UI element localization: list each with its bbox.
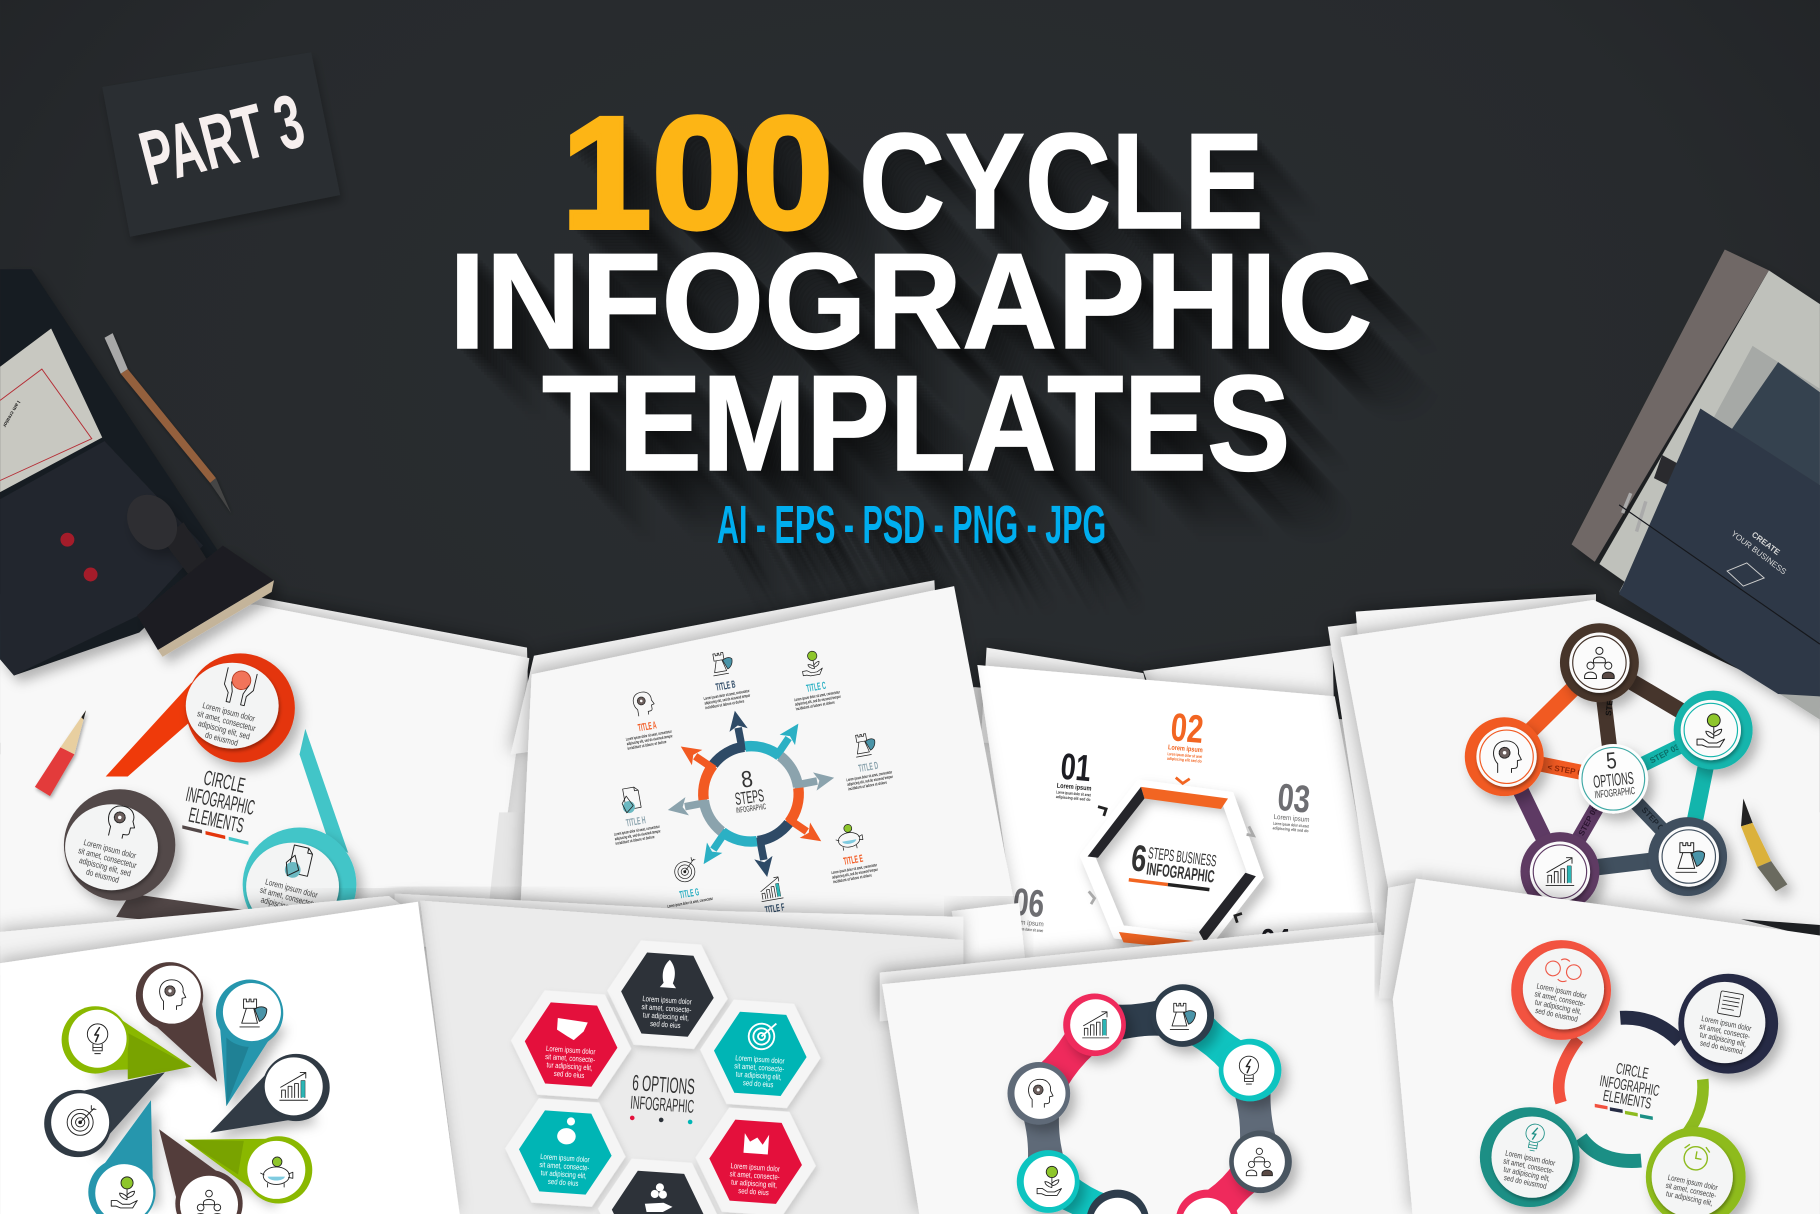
badge: part 3 card: PART 3 bbox=[132, 79, 312, 202]
center hub: 5 bbox=[1605, 747, 1618, 774]
item: title e: Lorem ipsum dolor sit amet, consectetur bbox=[831, 862, 878, 875]
brown ribbon bbox=[116, 894, 244, 928]
step 06: Lorem ipsum dolor sit amet bbox=[1007, 925, 1044, 933]
step 01: 01 bbox=[1059, 745, 1093, 789]
chevrons bbox=[1089, 778, 1254, 923]
arrow: orange bbox=[776, 788, 839, 849]
under sheet bbox=[488, 812, 546, 917]
item: title d: adipiscing elit, sed do eiusmod tempor bbox=[847, 774, 894, 787]
item: title e: adipiscing elit, sed do eiusmod tempor bbox=[832, 867, 879, 880]
item: title g: Lorem ipsum dolor sit amet, consectetur bbox=[667, 896, 714, 909]
petal: green bulb bbox=[62, 1006, 192, 1079]
heading: circle infographic elements bbox=[1596, 1058, 1663, 1114]
item: title g bbox=[660, 855, 714, 909]
front sheet bbox=[977, 665, 1384, 963]
prop: rubber stamp bbox=[117, 485, 274, 657]
hexagon: piggy bank: tur adipiscing elit, bbox=[540, 1170, 587, 1181]
badge: part 3 card bbox=[102, 52, 340, 237]
node: team bbox=[1560, 623, 1639, 702]
hexagon: handshake: Lorem ipsum dolor bbox=[546, 1045, 596, 1057]
front sheet bbox=[0, 604, 529, 946]
step 02: adipiscing elit sed do bbox=[1167, 756, 1202, 764]
item: title d: TITLE D bbox=[858, 761, 879, 775]
heading: 6 options bbox=[629, 1070, 696, 1124]
item: title d: incididunt ut labore et dolore bbox=[848, 780, 888, 791]
business card: I am creator bbox=[1, 399, 21, 428]
ring: teal bbox=[243, 828, 356, 941]
ring: navy notes bbox=[1678, 974, 1778, 1074]
ring: brown bbox=[64, 789, 175, 901]
step 01: Lorem ipsum dolor sit amet bbox=[1056, 789, 1092, 797]
hexagon: bar chart: Lorem ipsum dolor bbox=[730, 1163, 781, 1174]
hexagon: bar chart: sed do eius bbox=[738, 1188, 769, 1198]
ring: red minds: tur adipiscing elit, bbox=[1534, 999, 1582, 1016]
ring: teal bulb: tur adipiscing elit, bbox=[1503, 1166, 1551, 1184]
item: title a: incididunt ut labore et dolore bbox=[627, 739, 667, 751]
item: title h: incididunt ut labore et dolore bbox=[615, 834, 655, 846]
item: title h: Lorem ipsum dolor sit amet, consectetur bbox=[613, 824, 660, 837]
ring: teal bulb: sit amet, consecte- bbox=[1502, 1158, 1555, 1176]
panel: pinwheel petals bbox=[0, 896, 460, 1214]
hexagon: rocket: tur adipiscing elit, bbox=[643, 1012, 689, 1023]
ring: teal bulb bbox=[1480, 1107, 1580, 1207]
node: bottom navy bbox=[1086, 1190, 1149, 1214]
ring: red minds: sit amet, consecte- bbox=[1534, 991, 1586, 1009]
step 02: 02 bbox=[1169, 705, 1205, 752]
hexagon: bar chart: sit amet, consecte- bbox=[729, 1171, 780, 1182]
spokes bbox=[1504, 663, 1713, 872]
heading: circle infographic elements: ELEMENTS bbox=[1602, 1088, 1653, 1113]
item: title b: incididunt ut labore et dolore bbox=[705, 698, 745, 710]
node: chart bbox=[1520, 832, 1599, 911]
white sheet bbox=[0, 902, 460, 1214]
item: title f bbox=[758, 877, 786, 917]
front sheet bbox=[882, 934, 1416, 1214]
ring: navy notes: tur adipiscing elit, bbox=[1699, 1031, 1747, 1049]
panel: eight steps arrows bbox=[488, 580, 1017, 917]
hexagon: target: sed do eius bbox=[743, 1080, 774, 1090]
item: title e: TITLE E bbox=[843, 854, 864, 868]
notebook cover text: YOUR BUSINESS bbox=[1729, 529, 1789, 577]
petal: brown people bbox=[159, 1129, 243, 1214]
step 06: 06 bbox=[1011, 880, 1046, 926]
node: head bbox=[1007, 1062, 1070, 1125]
item: title d bbox=[839, 730, 894, 791]
step 03: Lorem ipsum dolor sit amet bbox=[1273, 821, 1310, 829]
front sheet bbox=[1393, 879, 1820, 1214]
petal: teal tower bbox=[216, 980, 283, 1106]
center label: 8 steps: STEPS bbox=[734, 785, 765, 809]
node: tower bbox=[1151, 984, 1214, 1047]
prop: envelope folder bbox=[0, 269, 221, 675]
hexagon: piggy bank bbox=[501, 1096, 629, 1209]
title: infographic: INFOGRAPHIC bbox=[449, 225, 1372, 377]
ring: red minds: Lorem ipsum dolor bbox=[1536, 983, 1588, 1001]
icon: red pencil bbox=[35, 710, 86, 796]
ring: brown: sit amet, consectetur bbox=[77, 845, 138, 871]
hexagon: rocket: Lorem ipsum dolor bbox=[642, 995, 693, 1007]
item: title a: Lorem ipsum dolor sit amet, consectetur bbox=[625, 729, 672, 742]
hexagon: target: Lorem ipsum dolor bbox=[735, 1055, 785, 1066]
ring: red: do eiusmod bbox=[204, 730, 239, 748]
node: plant coin bbox=[1674, 691, 1753, 769]
panel: circle infographic elements, four rings bbox=[1379, 879, 1820, 1214]
waisted connectors bbox=[1016, 992, 1284, 1214]
item: title d: Lorem ipsum dolor sit amet, consectetur bbox=[846, 769, 893, 782]
notebook cover text: CREATE bbox=[1750, 530, 1782, 557]
outer links bbox=[1504, 663, 1713, 872]
back sheet bbox=[0, 594, 529, 743]
node: plant bbox=[1017, 1150, 1079, 1213]
title: 100: 100 bbox=[561, 83, 833, 262]
arrow: gray west bbox=[666, 792, 722, 841]
item: title c bbox=[786, 648, 842, 711]
panel: five options network bbox=[1328, 594, 1820, 942]
ring: green clock: Lorem ipsum dolor bbox=[1667, 1174, 1719, 1193]
ring: brown: do eiusmod bbox=[85, 867, 120, 885]
arrow: orange west bbox=[663, 739, 726, 800]
item: title a: adipiscing elit, sed do eiusmod tempor bbox=[626, 733, 673, 746]
ring: teal: adipiscing elit, sed bbox=[260, 895, 314, 918]
hexagon: handshake: sit amet, consecte- bbox=[545, 1053, 595, 1065]
step 01: Lorem ipsum bbox=[1056, 783, 1092, 793]
title: templates: TEMPLATES bbox=[542, 347, 1290, 499]
item: title b bbox=[696, 649, 752, 710]
hexagon: piggy bank: sed do eius bbox=[548, 1178, 579, 1188]
item: title b: Lorem ipsum dolor sit amet, consectetur bbox=[703, 688, 750, 701]
back sheet bbox=[395, 894, 963, 963]
hexagon: target: tur adipiscing elit, bbox=[735, 1071, 782, 1082]
ring: red minds bbox=[1511, 940, 1611, 1040]
item: title c: incididunt ut labore et dolore bbox=[795, 700, 836, 711]
step 02: Lorem ipsum bbox=[1168, 744, 1203, 754]
prop: wooden pen bbox=[105, 333, 231, 513]
ring: teal: sit amet, consectetur bbox=[259, 885, 320, 910]
center hub: OPTIONS bbox=[1592, 768, 1635, 792]
hexagon: rocket: sed do eius bbox=[650, 1020, 681, 1030]
ring: red: sit amet, consectetur bbox=[196, 708, 257, 734]
ring: green clock: tur adipiscing elit, bbox=[1665, 1190, 1713, 1208]
ring: navy notes: sed do eiusmod bbox=[1699, 1040, 1743, 1057]
step 06: Lorem ipsum bbox=[1007, 918, 1044, 928]
underlying paper stack bbox=[0, 687, 1820, 1214]
item: title g: TITLE G bbox=[679, 887, 700, 901]
front sheet bbox=[520, 586, 1017, 917]
spoke labels: STEP 02 > bbox=[1604, 676, 1617, 716]
petal: brown head bbox=[136, 962, 217, 1082]
heading: 6 options: 6 OPTIONS bbox=[632, 1070, 696, 1099]
panel: six options hexagons bbox=[395, 894, 963, 1214]
item: title h: adipiscing elit, sed do eiusmod tempor bbox=[614, 828, 661, 841]
red ribbon bbox=[106, 682, 203, 776]
heading: circle infographic elements: INFOGRAPHIC bbox=[1598, 1073, 1661, 1100]
hexagon frame bbox=[1088, 787, 1256, 951]
item: title h bbox=[606, 784, 662, 846]
panel: circle infographic elements, three rings bbox=[0, 594, 529, 946]
panel: six steps hexagon bbox=[977, 645, 1384, 963]
back sheets bbox=[880, 923, 1387, 1021]
hexagon: target: sit amet, consecte- bbox=[734, 1063, 785, 1074]
step 03: adipiscing elit sed do bbox=[1272, 825, 1309, 833]
prop: notebooks bbox=[1572, 250, 1820, 720]
item: title a bbox=[618, 688, 674, 751]
step 02: Lorem ipsum dolor sit amet bbox=[1167, 751, 1203, 759]
ring: teal bulb: Lorem ipsum dolor bbox=[1504, 1150, 1556, 1168]
subtitle: file formats: AI - EPS - PSD - PNG - JPG bbox=[717, 495, 1106, 555]
ring: navy notes: Lorem ipsum dolor bbox=[1701, 1015, 1752, 1034]
ring: teal bulb: sed do eiusmod bbox=[1503, 1174, 1547, 1191]
node: chart bbox=[1063, 993, 1126, 1056]
hexagon: piggy bank: sit amet, consecte- bbox=[539, 1161, 590, 1173]
item: title c: Lorem ipsum dolor sit amet, consectetur bbox=[794, 689, 841, 702]
arrow: navy north bbox=[704, 709, 753, 765]
step 03: 03 bbox=[1276, 776, 1312, 822]
ring: brown: adipiscing elit, sed bbox=[78, 855, 132, 879]
spoke labels: STEP 04 > bbox=[1640, 805, 1673, 841]
center label: 8 steps: INFOGRAPHIC bbox=[736, 802, 767, 815]
arrow: teal bbox=[745, 706, 806, 769]
stray sheet behind hexagon panel bbox=[952, 903, 1026, 969]
back sheet bbox=[1379, 882, 1418, 998]
center hub: INFOGRAPHIC bbox=[1594, 786, 1636, 801]
ring: red: Lorem ipsum dolor bbox=[201, 700, 257, 724]
red buttons bbox=[60, 533, 98, 581]
item: title h: TITLE H bbox=[625, 815, 647, 829]
title: cycle: CYCLE bbox=[859, 105, 1264, 257]
back sheet bbox=[511, 580, 940, 754]
business card bbox=[0, 328, 102, 492]
center label: 8 steps: 8 bbox=[739, 765, 754, 793]
item: title a: TITLE A bbox=[637, 720, 658, 734]
heading: circle infographic elements: CIRCLE bbox=[202, 766, 247, 798]
spoke labels bbox=[1547, 676, 1687, 844]
ring: red bbox=[186, 653, 295, 763]
node: tower bbox=[1648, 817, 1727, 896]
ring: teal: Lorem ipsum dolor bbox=[264, 877, 319, 900]
center label: 8 steps bbox=[730, 764, 767, 815]
item: title c: adipiscing elit, sed do eiusmod tempor bbox=[795, 694, 841, 707]
hexagon: hand with molecules bbox=[594, 1157, 722, 1214]
prop: yellow pencil bbox=[1741, 799, 1787, 891]
node: people bbox=[1229, 1130, 1292, 1193]
hexagon: bar chart: tur adipiscing elit, bbox=[731, 1179, 777, 1190]
step 03 bbox=[1272, 776, 1313, 833]
back sheet bbox=[0, 896, 418, 975]
heading: circle infographic elements: INFOGRAPHIC bbox=[184, 783, 257, 820]
color legend bars bbox=[182, 825, 248, 845]
panel: chain ring bbox=[880, 923, 1416, 1214]
ring: navy notes: sit amet, consecte- bbox=[1699, 1023, 1751, 1042]
item: title b: adipiscing elit, sed do eiusmod tempor bbox=[704, 693, 751, 706]
connector arcs bbox=[1559, 1018, 1703, 1161]
ring: red minds: sed do eiusmod bbox=[1534, 1007, 1578, 1024]
petal: teal plant bbox=[88, 1100, 156, 1214]
step 06 bbox=[1007, 880, 1048, 933]
petal: navy target bbox=[44, 1072, 165, 1157]
spoke labels: < STEP 01 bbox=[1547, 763, 1588, 778]
ring: green clock bbox=[1646, 1127, 1746, 1214]
hexagon: handshake: tur adipiscing elit, bbox=[546, 1062, 593, 1073]
petal: green piggy bbox=[185, 1136, 312, 1204]
item: title b: TITLE B bbox=[715, 679, 737, 694]
hexagon: piggy bank: Lorem ipsum dolor bbox=[540, 1153, 590, 1165]
step 01: adipiscing elit sed do bbox=[1056, 794, 1091, 802]
hexagon: handshake bbox=[507, 988, 635, 1101]
node: head gear bbox=[1465, 717, 1544, 796]
back sheets bbox=[1328, 594, 1596, 934]
item: title e bbox=[824, 821, 879, 884]
arrow: teal south bbox=[696, 818, 757, 882]
node: bottom pink bbox=[1176, 1190, 1238, 1214]
petal: navy chart bbox=[210, 1054, 330, 1133]
item: title c: TITLE C bbox=[806, 681, 827, 695]
hexagon: bar chart bbox=[692, 1105, 819, 1214]
color legend bars bbox=[1595, 1104, 1653, 1120]
step 03: Lorem ipsum bbox=[1273, 814, 1310, 824]
arrow: gray bbox=[780, 747, 836, 796]
step 04: 04 bbox=[1261, 923, 1291, 959]
hexagon: target bbox=[696, 998, 824, 1110]
step 02 bbox=[1167, 705, 1207, 764]
ring: brown: Lorem ipsum dolor bbox=[83, 837, 138, 861]
item: title f: TITLE F bbox=[764, 902, 786, 917]
arrow ring bbox=[652, 695, 850, 893]
hexagon center label: INFOGRAPHIC bbox=[1145, 858, 1216, 887]
front sheet bbox=[1341, 600, 1820, 942]
hexagon: handshake: sed do eius bbox=[553, 1070, 585, 1080]
arrow: navy south bbox=[749, 823, 798, 879]
hexagon: rocket bbox=[604, 938, 731, 1051]
node: bulb bbox=[1219, 1039, 1281, 1101]
ring: red: adipiscing elit, sed bbox=[197, 718, 251, 742]
back sheets bbox=[981, 645, 1335, 743]
teal ribbon bbox=[300, 729, 348, 853]
center hub bbox=[1579, 744, 1648, 814]
heading: circle infographic elements bbox=[180, 764, 261, 839]
heading: 6 options: INFOGRAPHIC bbox=[630, 1091, 695, 1117]
spoke labels: STEP 03 > bbox=[1648, 739, 1687, 765]
hexagon center label: STEPS BUSINESS bbox=[1147, 844, 1218, 870]
heading: circle infographic elements: ELEMENTS bbox=[187, 804, 246, 838]
heading: circle infographic elements: CIRCLE bbox=[1615, 1060, 1650, 1083]
dark gap corner bbox=[1741, 919, 1820, 935]
hexagon: rocket: sit amet, consecte- bbox=[641, 1004, 692, 1015]
hexagon center label: 6 bbox=[1129, 836, 1149, 880]
spoke labels: < STEP 05 bbox=[1573, 804, 1600, 844]
step 01 bbox=[1056, 744, 1095, 802]
hexagon center label bbox=[1129, 836, 1218, 892]
ring: green clock: sit amet, consecte- bbox=[1665, 1182, 1717, 1201]
item: title e: incididunt ut labore et dolore bbox=[832, 872, 873, 884]
gray sheet bbox=[420, 901, 963, 1214]
